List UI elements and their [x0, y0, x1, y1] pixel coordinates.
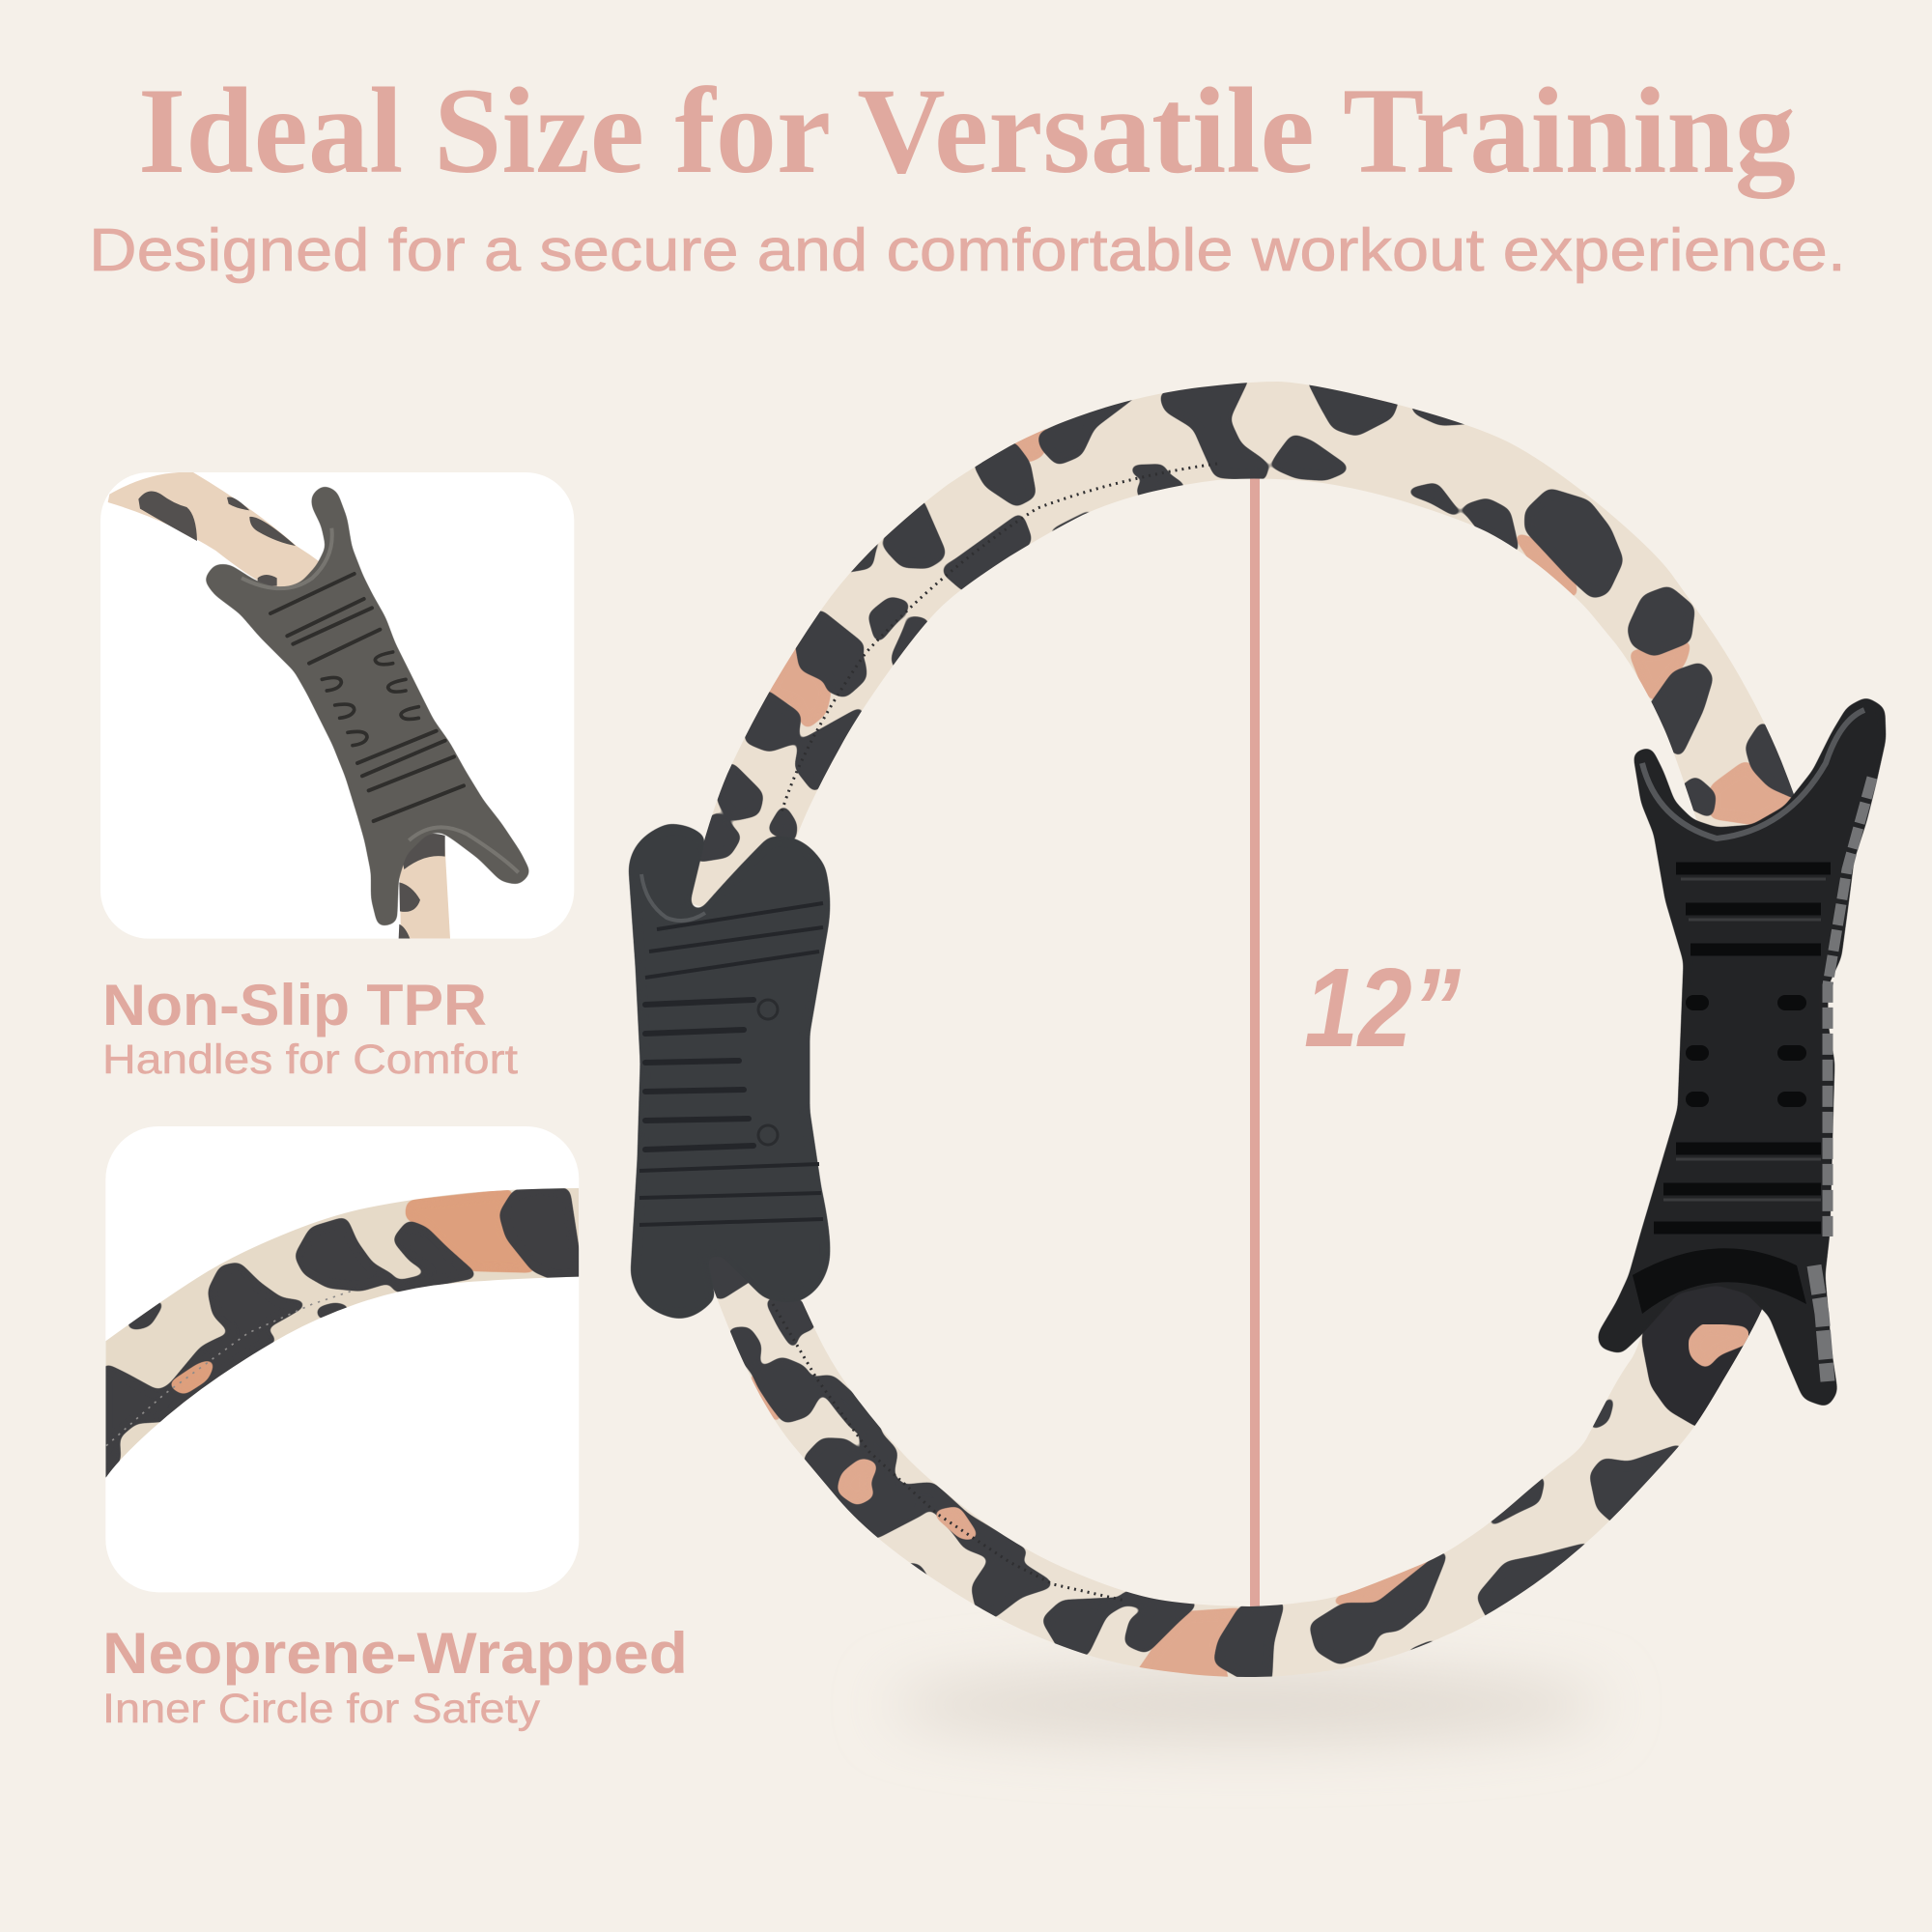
label: neoprene-wrapped: Neoprene-Wrapped	[102, 1621, 688, 1686]
left grip handle	[631, 826, 828, 1317]
diameter label: 12”	[1304, 945, 1461, 1070]
12 inch diameter line	[1250, 478, 1260, 1606]
ring shadow	[889, 1670, 1604, 1740]
panel: non-slip handle photo	[100, 472, 574, 939]
title: Ideal Size for Versatile Training	[138, 64, 1796, 199]
upper ring section	[108, 472, 322, 592]
label: non-slip TPR: Non-Slip TPR	[102, 973, 487, 1037]
lower ring section	[399, 831, 450, 939]
grey TPR handle	[207, 488, 528, 924]
product: leopard print pilates ring	[631, 367, 1882, 1690]
label: non-slip TPR	[102, 973, 518, 1083]
lower ring arc	[709, 1256, 1762, 1677]
right grip handle	[1602, 701, 1882, 1403]
label: neoprene-wrapped	[102, 1621, 688, 1732]
upper ring arc	[692, 382, 1794, 906]
label: non-slip TPR: Handles for Comfort	[102, 1037, 518, 1083]
panel: neoprene wrap photo	[99, 1126, 582, 1592]
subtitle: Designed for a secure and comfortable workout experience.	[89, 217, 1846, 284]
neoprene ring close-up	[99, 1176, 582, 1485]
label: neoprene-wrapped: Inner Circle for Safety	[102, 1686, 541, 1732]
